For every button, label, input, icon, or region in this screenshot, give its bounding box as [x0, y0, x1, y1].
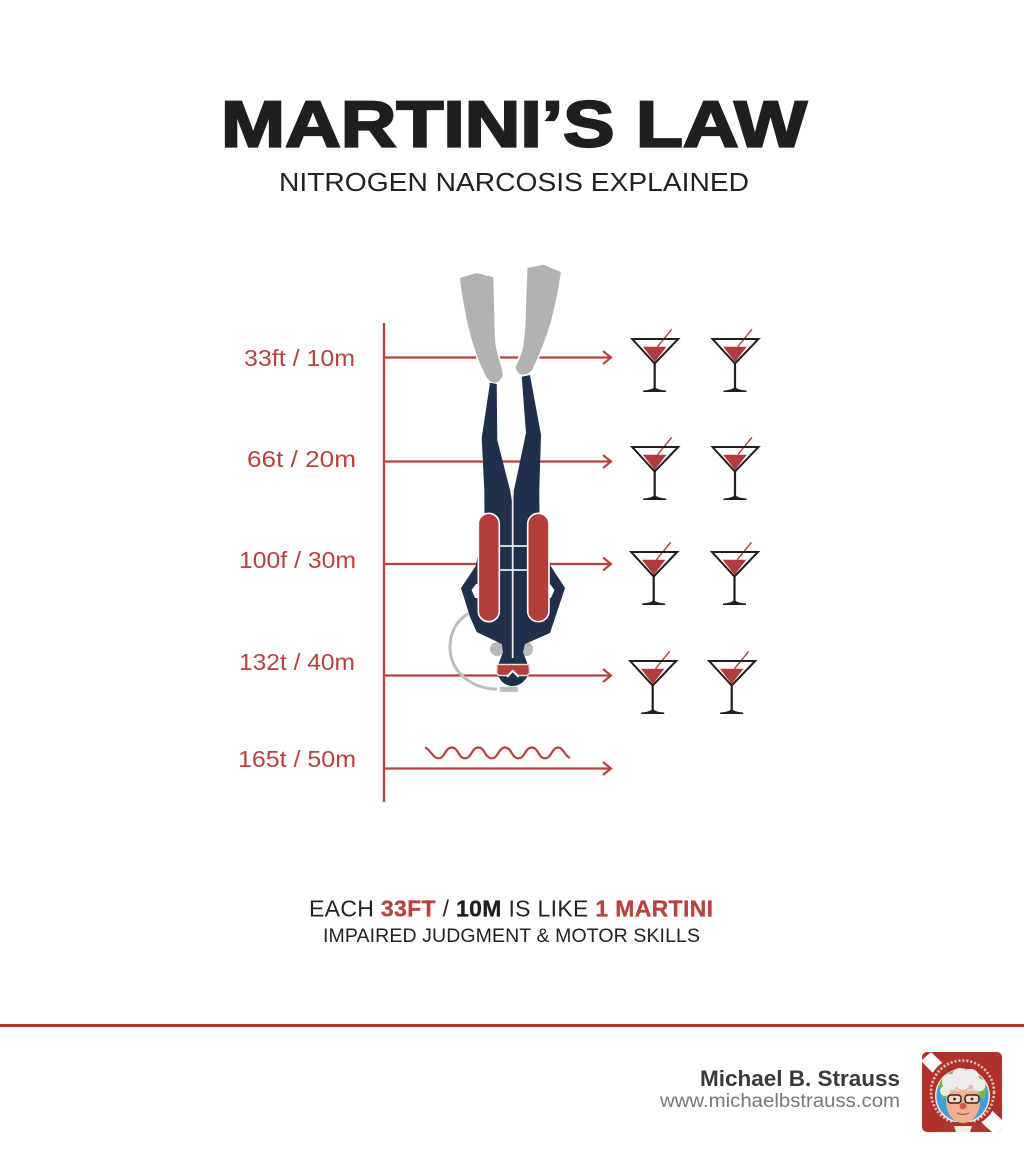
depth arrows — [384, 351, 611, 775]
author website: www.michaelbstrauss.com — [659, 1091, 900, 1112]
footer rule — [0, 1024, 1024, 1027]
depth labels — [238, 345, 356, 772]
title: MARTINI’S LAW — [221, 88, 808, 160]
author avatar — [922, 1052, 1002, 1132]
diver illustration — [450, 264, 565, 692]
label: 165t / 50m: 165t / 50m — [238, 746, 356, 772]
row 4 glasses — [630, 651, 755, 714]
row 3 glasses — [631, 542, 758, 605]
martini glasses grid — [630, 329, 758, 714]
label: 132t / 40m: 132t / 40m — [239, 649, 355, 675]
right tank — [528, 513, 549, 622]
summary subline: IMPAIRED JUDGMENT & MOTOR SKILLS — [323, 925, 700, 947]
author name: Michael B. Strauss — [700, 1066, 900, 1091]
summary line: EACH 33FT / 10M IS LIKE 1 MARTINI — [309, 896, 713, 922]
row 2 glasses — [632, 437, 758, 500]
hose — [450, 614, 497, 689]
mask — [497, 664, 530, 677]
label: 33ft / 10m: 33ft / 10m — [244, 345, 355, 371]
right fin — [515, 264, 562, 375]
icon: wave — [425, 748, 570, 758]
label: 66t / 20m: 66t / 20m — [247, 446, 356, 472]
depth axis — [383, 323, 385, 802]
left fin — [459, 272, 504, 384]
regulator — [500, 687, 518, 692]
arm notches — [472, 584, 554, 598]
subtitle: NITROGEN NARCOSIS EXPLAINED — [279, 167, 749, 197]
ears — [490, 642, 533, 656]
label: 100f / 30m: 100f / 30m — [239, 547, 356, 573]
harness lines — [498, 490, 529, 658]
left tank — [478, 513, 499, 622]
suit body — [461, 375, 565, 686]
row 1 glasses — [632, 329, 758, 392]
